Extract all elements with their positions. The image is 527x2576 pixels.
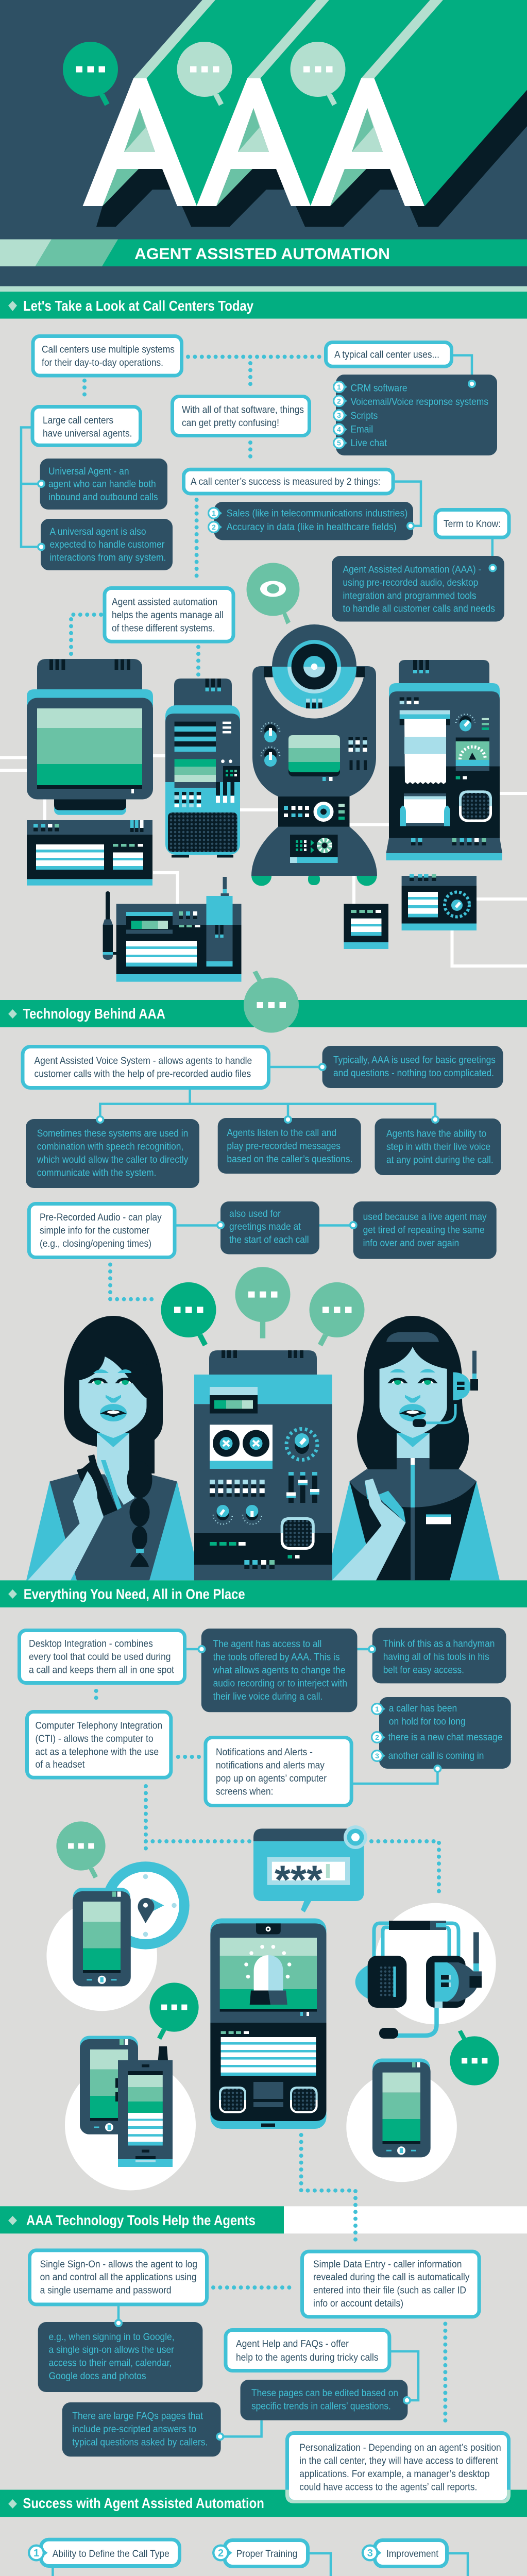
callout: agent help and FAQs: Agent Help and FAQs - offer	[236, 2339, 349, 2350]
panel: speech recognition: combination with speech recognition,	[37, 1142, 183, 1153]
callout: agent help and FAQs	[226, 2330, 389, 2371]
panel: access to tools: The agent has access to all	[213, 1639, 321, 1650]
connector lines: section 5	[53, 2553, 468, 2576]
badge 1: 1	[212, 509, 216, 517]
machine: small terminal	[344, 904, 388, 949]
heading: let's take a look: Let's Take a Look at Call Centers Today	[23, 298, 253, 314]
callout: success measures	[183, 469, 393, 494]
panel: AAA definition: integration and programmed tools	[343, 590, 476, 602]
panel: greetings	[216, 1201, 319, 1254]
callout: typical call center uses	[326, 342, 451, 366]
callout: pre-recorded audio: (e.g., closing/opening times)	[40, 1239, 151, 1249]
panel: agents step in: at any point during the call.	[386, 1155, 494, 1165]
callout: improvement: Improvement	[386, 2549, 439, 2560]
dotted connectors: section 3	[96, 1691, 439, 2244]
panel: access to tools: what allows agents to change the	[213, 1665, 346, 1676]
heading: technology tools: AAA Technology Tools Help the Agents	[26, 2212, 256, 2228]
badge 2	[333, 395, 347, 407]
panel: single sign-on example	[38, 2319, 202, 2392]
callout: ability to define the call type: 1	[33, 2548, 39, 2559]
callout: proper training: 2	[218, 2548, 224, 2559]
badge 1	[333, 381, 347, 393]
dotted connector: audio to bubbles	[110, 1264, 158, 1299]
white circle behind left phone	[46, 1901, 157, 2011]
callout: agent assisted automation helps: of these different systems.	[112, 623, 215, 634]
callout: ability to define the call type: Ability to Define the Call Type	[53, 2549, 169, 2560]
panel: typical AAA uses: and questions - nothing too complicated.	[333, 1068, 494, 1079]
panel: AAA definition: to handle all customer calls and needs	[343, 604, 495, 614]
badge 5: 5	[337, 439, 341, 447]
badge 2: 2	[375, 1733, 379, 1741]
icon: speech bubble	[56, 1821, 106, 1878]
callout: agent assisted voice system: customer calls with the help of pre-recorded audio files	[34, 1069, 251, 1080]
icon: compass and map pin	[101, 1861, 190, 1950]
panel: list of systems: Voicemail/Voice response systems	[350, 397, 488, 408]
panel: FAQs pages: include pre-scripted answers to	[72, 2424, 196, 2435]
dotted connectors: section 1	[71, 357, 319, 674]
callout: simple data entry	[302, 2251, 479, 2317]
panel: alert conditions: on hold for too long	[389, 1716, 466, 1727]
badge 4	[333, 423, 347, 436]
panel: access to tools: the tools offered by AAA. This is	[213, 1652, 340, 1663]
panel: agents listen: based on the caller’s questions.	[227, 1154, 352, 1165]
badge 5	[333, 437, 347, 449]
callout: computer telephony integration: (CTI) - allows the computer to	[35, 1734, 154, 1744]
callout: proper training	[212, 2540, 308, 2567]
panel: universal agent expectations	[37, 519, 173, 570]
callout: simple data entry: entered into their file (such as caller ID	[313, 2285, 466, 2296]
panel: sales and accuracy: Accuracy in data (like in healthcare fields)	[227, 522, 397, 533]
callout: improvement: 3	[367, 2548, 373, 2559]
callout: multiple systems: Call centers use multiple systems	[42, 344, 175, 355]
panel: access to tools	[197, 1629, 358, 1712]
panel: universal agent expectations: interactions from any system.	[49, 553, 166, 564]
panel: AAA definition	[332, 556, 504, 621]
white circle behind walkie-talkie	[65, 2060, 196, 2191]
speech bubble 2	[177, 42, 232, 106]
panel: agents step in: Agents have the ability to	[386, 1129, 486, 1140]
callout: computer telephony integration: act as a telephone with the use	[35, 1747, 159, 1757]
panel: universal agent definition: Universal Agent - an	[48, 466, 129, 477]
panel: alert conditions: another call is coming in	[388, 1751, 484, 1761]
callout: desktop integration	[20, 1630, 184, 1683]
panel: editable pages	[240, 2380, 411, 2420]
panel: alert conditions	[371, 1697, 511, 1773]
speech bubble right	[309, 1282, 365, 1346]
callout: notifications and alerts: notifications and alerts may	[216, 1760, 325, 1771]
white circle behind right phone	[346, 2072, 457, 2182]
panel: universal agent definition	[37, 459, 167, 510]
hero banner background	[0, 0, 527, 292]
callout: computer telephony integration: of a headset	[35, 1759, 85, 1770]
callout: improvement	[362, 2540, 447, 2567]
callout: personalization: applications. For example, a manager’s desktop	[299, 2469, 489, 2480]
panel: live agents get tired	[349, 1201, 497, 1259]
heading: everything you need	[0, 1580, 527, 1607]
callout: large call centers: have universal agents.	[43, 428, 132, 439]
panel: sales and accuracy: Sales (like in telecommunications industries)	[227, 509, 407, 519]
panel: AAA definition: Agent Assisted Automation (AAA) -	[343, 565, 481, 575]
badge 1	[371, 1703, 385, 1715]
white circle behind headset	[375, 1903, 496, 2024]
machine: central robot	[251, 624, 377, 886]
callout: single sign-on: a single username and password	[40, 2285, 172, 2296]
callout: term to know: Term to Know:	[444, 519, 501, 530]
heading: success with AAA	[0, 2490, 527, 2517]
callout: notifications and alerts: screens when:	[216, 1787, 273, 1798]
callout: personalization: could have access to the agents’ call reports.	[299, 2482, 477, 2493]
callout: notifications and alerts: Notifications and Alerts -	[216, 1747, 313, 1758]
callout: single sign-on	[30, 2250, 207, 2304]
panel: handyman analogy	[368, 1628, 506, 1683]
badge 1: 1	[337, 383, 341, 391]
badge 4: 4	[337, 426, 341, 434]
title ribbon: agent assisted automation	[0, 239, 527, 266]
title ribbon: agent assisted automation: AGENT ASSISTED AUTOMATION	[134, 245, 390, 263]
panel: list of systems: Email	[350, 424, 373, 435]
machine: flat console	[27, 820, 152, 886]
callout: computer telephony integration: Computer Telephony Integration	[35, 1720, 162, 1731]
hero title: AAA letters	[82, 0, 527, 227]
machine: tall server	[165, 679, 240, 857]
panel: sales and accuracy	[208, 502, 415, 540]
panel: universal agent expectations: expected to handle customer	[49, 539, 165, 550]
speech bubble 1	[63, 42, 118, 106]
callout: notifications and alerts	[206, 1737, 351, 1805]
speech bubble centre	[235, 1267, 291, 1338]
badge 2	[208, 521, 222, 533]
panel: alert conditions: there is a new chat message	[388, 1732, 502, 1743]
panel: access to tools: audio recording or to interject with	[213, 1679, 347, 1689]
callout: personalization	[287, 2433, 509, 2502]
heading: technology behind AAA	[0, 1000, 527, 1027]
callout: personalization: in the call center, they will have access to different	[299, 2455, 499, 2467]
callout: agent assisted automation helps	[105, 588, 233, 641]
panel: single sign-on example: Google docs and photos	[49, 2371, 146, 2382]
callout: agent assisted voice system	[23, 1047, 269, 1088]
panel: typical AAA uses	[318, 1046, 503, 1088]
heading: everything you need: Everything You Need, All in One Place	[24, 1586, 245, 1602]
badge 2: 2	[337, 397, 341, 405]
badge 3: 3	[337, 411, 341, 419]
panel: typical AAA uses: Typically, AAA is used for basic greetings	[333, 1055, 496, 1066]
icon: speech bubble on technology heading	[244, 971, 299, 1032]
panel: alert conditions: a caller has been	[389, 1703, 457, 1714]
panel: list of systems: CRM software	[350, 383, 407, 394]
icon: smartphone	[73, 1888, 131, 1987]
panel: speech recognition	[26, 1115, 199, 1188]
panel: FAQs pages	[62, 2402, 224, 2456]
dotted connectors: section 4	[213, 2287, 445, 2426]
panel: universal agent definition: agent who can handle both	[48, 479, 156, 489]
heading: success with AAA: Success with Agent Assisted Automation	[23, 2495, 264, 2511]
badge 1	[208, 507, 222, 519]
callout: computer telephony integration	[27, 1711, 171, 1777]
callout: large call centers: Large call centers	[43, 415, 113, 426]
illustration: left agent	[26, 1316, 200, 1580]
callout: term to know	[435, 510, 509, 537]
panel: agents listen: Agents listen to the call and	[227, 1128, 336, 1139]
panel: FAQs pages: There are large FAQs pages that	[72, 2411, 203, 2422]
callout: success measures: A call center’s success is measured by 2 things:	[191, 477, 380, 487]
badge 3: 3	[375, 1752, 379, 1760]
panel: access to tools: their live voice during a call.	[213, 1691, 322, 1702]
connector lines: section 4	[118, 2306, 418, 2436]
panel: agents listen	[218, 1115, 361, 1174]
callout: large call centers	[32, 407, 140, 445]
callout: notifications and alerts: pop up on agents’ computer	[216, 1773, 327, 1784]
callout: agent assisted voice system: Agent Assisted Voice System - allows agents to handle	[34, 1056, 252, 1066]
panel: AAA definition: using pre-recorded audio, desktop	[343, 578, 478, 588]
illustration: right agent	[326, 1316, 500, 1580]
callout: pre-recorded audio: simple info for the customer	[40, 1225, 150, 1236]
panel: agents step in	[375, 1115, 501, 1175]
panel: FAQs pages: typical questions asked by callers.	[72, 2437, 208, 2448]
panel: universal agent definition: inbound and outbound calls	[48, 492, 158, 503]
callout: agent assisted automation helps: helps the agents manage all	[112, 610, 224, 621]
speech bubble left	[161, 1282, 216, 1346]
callout: simple data entry: revealed during the call is automatically	[313, 2272, 470, 2283]
callout: simple data entry: Simple Data Entry - caller information	[313, 2259, 462, 2270]
speech bubble 3	[291, 42, 345, 106]
connector lines: section 3	[186, 1649, 437, 1784]
callout: typical call center uses: A typical call center uses...	[334, 350, 439, 361]
panel: speech recognition: which would allow the caller to directly	[37, 1155, 189, 1165]
badge 1: 1	[375, 1705, 379, 1713]
callout: ability to define the call type	[28, 2539, 179, 2566]
heading: technology behind AAA: Technology Behind AAA	[23, 1006, 165, 1022]
icon: right smartphone	[372, 2059, 431, 2157]
white wiring between machines	[0, 756, 527, 966]
callout: desktop integration: Desktop Integration - combines	[29, 1638, 153, 1649]
panel: agents step in: step in with their live voice	[386, 1142, 490, 1153]
callout: multiple systems: for their day-to-day operations.	[42, 358, 163, 368]
panel: agents listen: play pre-recorded messages	[227, 1141, 341, 1152]
callout: proper training: Proper Training	[236, 2549, 297, 2560]
callout: confusing software: With all of that software, things	[182, 405, 304, 415]
callout: pre-recorded audio: Pre-Recorded Audio - can play	[40, 1212, 162, 1223]
icon: back smartphone	[80, 2036, 138, 2134]
icon: headset	[355, 1921, 482, 2039]
panel: live agents get tired: info over and over again	[363, 1238, 459, 1249]
machine: large monitor	[27, 659, 153, 815]
icon: walkie-talkie	[118, 2046, 173, 2167]
badge 2: 2	[212, 523, 216, 531]
callout: confusing software: can get pretty confusing!	[182, 418, 279, 429]
panel: greetings: greetings made at	[229, 1222, 301, 1232]
badge 2	[371, 1731, 385, 1743]
icon: login window	[253, 1825, 367, 1912]
callout: single sign-on: on and control all the applications using	[40, 2272, 197, 2283]
panel: greetings: also used for	[229, 1209, 281, 1219]
callout: confusing software	[172, 397, 309, 436]
heading: technology tools	[0, 2206, 527, 2233]
callout: personalization: Personalization - Depending on an agent’s position	[299, 2443, 501, 2453]
callout: agent help and FAQs: help to the agents during tricky calls	[236, 2352, 379, 2363]
panel: single sign-on example: access to their email, calendar,	[49, 2358, 172, 2368]
heading: let's take a look	[0, 292, 527, 318]
panel: live agents get tired: get tired of repeating the same	[363, 1225, 485, 1235]
callout: pre-recorded audio	[29, 1204, 175, 1257]
panel: universal agent expectations: A universal agent is also	[49, 527, 146, 537]
callout: single sign-on: Single Sign-On - allows the agent to log	[40, 2259, 197, 2270]
callout: desktop integration: a call and keeps them all in one spot	[29, 1665, 175, 1675]
icon: speech bubble	[450, 2030, 499, 2086]
panel: editable pages: specific trends in callers’ questions.	[251, 2401, 391, 2412]
icon: eye speech bubble	[246, 563, 300, 624]
panel: handyman analogy: having all of his tools in his	[383, 1652, 489, 1663]
callout: simple data entry: info or account details)	[313, 2298, 403, 2309]
panel: editable pages: These pages can be edited based on	[251, 2388, 398, 2399]
connector lines: section 2	[100, 1067, 435, 1225]
callout: multiple systems	[33, 336, 181, 376]
panel: greetings: the start of each call	[229, 1235, 309, 1246]
panel: list of systems: Scripts	[350, 411, 378, 421]
password text: ***	[275, 1857, 323, 1902]
panel: handyman analogy: Think of this as a handyman	[383, 1638, 495, 1649]
badge 3	[371, 1750, 385, 1762]
panel: list of systems: Live chat	[350, 438, 387, 449]
panel: single sign-on example: a single sign-on allows the user	[49, 2345, 175, 2355]
badge 3	[333, 409, 347, 421]
connector lines: section 1	[21, 355, 492, 568]
panel: live agents get tired: used because a live agent may	[363, 1212, 487, 1223]
callout: desktop integration: every tool that could be used during	[29, 1652, 171, 1663]
icon: alert tablet	[210, 1919, 327, 2129]
machine: printer tower	[386, 660, 502, 860]
panel: speech recognition: communicate with the system.	[37, 1168, 156, 1179]
panel: speech recognition: Sometimes these systems are used in	[37, 1128, 188, 1139]
machine: dial unit	[402, 874, 477, 930]
panel: handyman analogy: belt for easy access.	[383, 1665, 464, 1675]
panel: single sign-on example: e.g., when signing in to Google,	[49, 2332, 175, 2343]
machine: desk phone	[103, 877, 241, 982]
machine: audio mixing console	[194, 1350, 332, 1580]
callout: agent assisted automation helps: Agent assisted automation	[112, 597, 217, 608]
panel: list of systems	[333, 375, 497, 455]
icon: speech bubble	[149, 1982, 199, 2040]
